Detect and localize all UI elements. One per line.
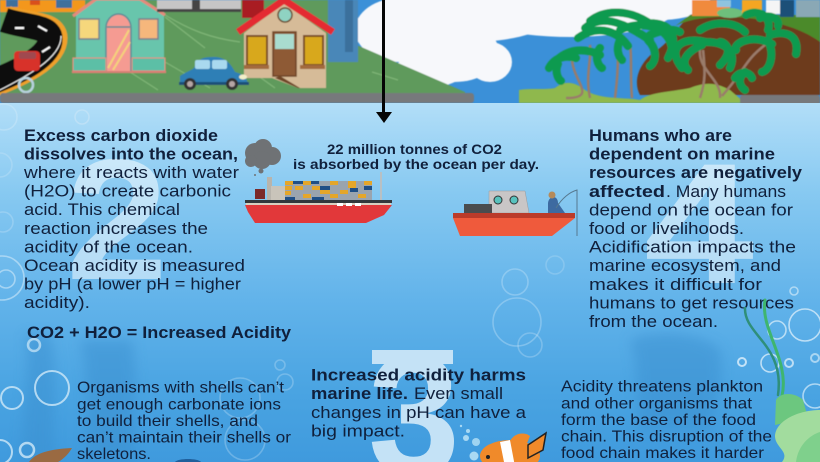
center text: step 3: changes in pH can have a	[311, 403, 527, 422]
top scene: town, clouds and island	[0, 0, 820, 105]
bottom left text: shells: can’t maintain their shells or	[77, 430, 292, 446]
center statistic	[293, 142, 539, 172]
left text: step 2: dissolves into the ocean,	[24, 145, 238, 164]
bottom left text: shells: Organisms with shells can’t	[77, 380, 285, 397]
left text: step 2: acidity of the ocean.	[24, 237, 193, 256]
low green hills	[519, 83, 745, 103]
arrow	[376, 0, 392, 123]
blue tower	[328, 0, 358, 62]
right text: step 4: from the ocean.	[589, 312, 718, 331]
bottom left text: shells: get enough carbonate ions	[77, 396, 281, 413]
icon: smoke cloud	[245, 139, 281, 176]
right text: step 4: depend on the ocean for	[589, 200, 793, 219]
sky	[0, 0, 820, 104]
left text: step 2: by pH (a lower pH = higher	[24, 274, 241, 293]
right text: step 4: makes it difficult for	[589, 275, 762, 294]
orange building	[0, 0, 85, 12]
equation: CO2 + H2O = Increased Acidity	[27, 323, 292, 342]
icon: shell top	[175, 459, 201, 462]
bottom right text: plankton: and other organisms that	[561, 395, 753, 412]
right text: step 4: . Many humans	[666, 182, 786, 201]
bottom left text: shells	[77, 380, 292, 462]
ocean background	[0, 103, 820, 462]
icon: clownfish with bubbles	[460, 425, 546, 462]
cliff and distant buildings	[637, 0, 820, 95]
hill and ground	[0, 0, 465, 94]
right road bar	[740, 95, 820, 105]
center text: step 3: big impact.	[311, 422, 405, 440]
bottom right text: plankton: Acidity threatens plankton	[561, 379, 763, 396]
center statistic: is absorbed by the ocean per day.	[293, 157, 539, 172]
center statistic: 22 million tonnes of CO2	[327, 142, 502, 157]
faint seaweed silhouettes	[20, 333, 721, 462]
bottom right text: plankton: form the base of the food	[561, 412, 756, 429]
left text: step 2	[23, 126, 245, 312]
center text: step 3	[311, 366, 527, 440]
right text: step 4: affected	[589, 182, 665, 201]
right text: step 4: Acidification impacts the	[589, 238, 796, 257]
green house	[72, 0, 166, 73]
right text: step 4: Humans who are	[589, 126, 732, 145]
icon: fishing boat	[453, 190, 577, 236]
center text: step 3: Increased acidity harms	[311, 366, 526, 385]
center text: step 3: Even small	[414, 384, 503, 403]
palm trees	[549, 12, 797, 98]
big numeral 4: 4	[644, 128, 754, 320]
bottom right text: plankton	[561, 379, 772, 462]
left text: step 2: acidity).	[24, 293, 90, 312]
big numeral 3	[372, 350, 454, 462]
bottom left text: shells: to build their shells, and	[77, 413, 258, 430]
right text: step 4: marine ecosystem, and	[589, 256, 781, 275]
left text: step 2: Excess carbon dioxide	[24, 126, 218, 145]
left text: step 2: Ocean acidity is measured	[24, 256, 245, 275]
left text: step 2: (H2O) to create carbonic	[24, 182, 232, 201]
bottom right text: plankton: chain. This disruption of the	[561, 428, 772, 446]
left text: step 2: where it reacts with water	[23, 163, 239, 182]
seaweed	[745, 300, 783, 396]
icon: container ship	[245, 172, 392, 223]
right text: step 4: resources are negatively	[589, 163, 803, 182]
icon: green shell coral	[775, 394, 820, 462]
clouds	[355, 0, 710, 87]
bubbles	[0, 104, 820, 462]
road with car	[0, 19, 61, 92]
icon: mussel	[29, 448, 72, 462]
right text: step 4: humans to get resources	[589, 293, 794, 312]
road bars	[0, 93, 474, 103]
center text: step 3: marine life.	[311, 384, 408, 403]
blue car	[179, 57, 249, 90]
right text: step 4	[589, 126, 803, 331]
red house	[238, 0, 333, 88]
left text: step 2: reaction increases the	[24, 219, 208, 238]
right text: step 4: dependent on marine	[589, 145, 775, 164]
right text: step 4: food or livelihoods.	[589, 219, 744, 238]
left text: step 2: acid. This chemical	[24, 200, 180, 219]
gray building	[157, 0, 241, 12]
bottom right text: plankton: food chain makes it harder	[561, 445, 765, 462]
big numeral 2: 2	[66, 124, 168, 316]
